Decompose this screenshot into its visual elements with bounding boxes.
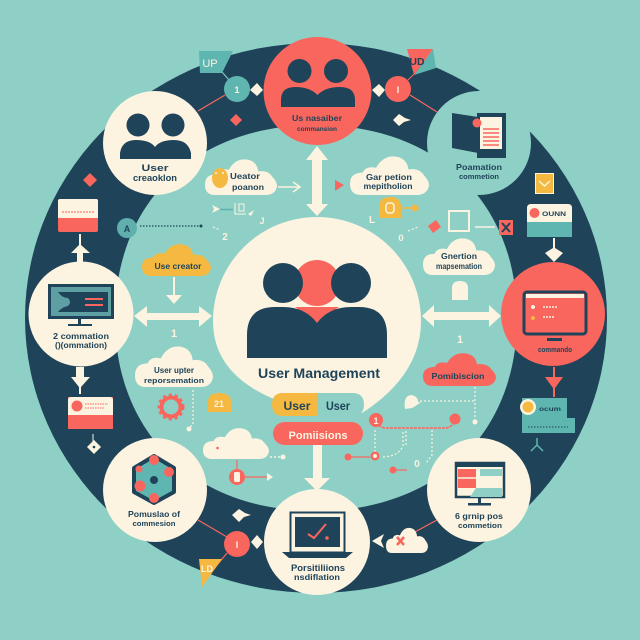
connector: upper-left dotted <box>117 218 202 238</box>
panel: bottom centre laptop: Porsitiliions <box>291 563 345 573</box>
cloud: permission red: Pomibiscion <box>432 372 485 381</box>
icon: red node <box>229 460 273 485</box>
node: top right <box>372 74 437 112</box>
panel: right red monitor <box>501 262 605 366</box>
card: right upper <box>527 204 572 237</box>
node: top left: 1 <box>234 85 240 95</box>
arrow: card to right monitor <box>545 238 563 262</box>
icon: small arrow and bracket: 2 <box>222 232 228 243</box>
tag: top left UP: UP <box>202 58 218 70</box>
pill: user: User <box>284 401 311 413</box>
card: right lower <box>520 398 575 433</box>
panel: bottom right monitor: commetion <box>458 521 502 530</box>
cloud: permission red <box>423 353 496 386</box>
connector: dotted network: 0 <box>414 459 420 470</box>
connector: upper-left dotted: A <box>124 224 131 234</box>
panel: top users circle: Us nasaiber <box>292 114 342 123</box>
panel: central user management <box>213 217 421 413</box>
cloud: gnertion: Gnertion <box>441 252 477 261</box>
card: right upper: OUNN <box>542 211 566 218</box>
panel: bottom left gear: Pomuslao of <box>128 509 180 519</box>
cloud: user person: poanon <box>232 182 264 192</box>
cloud: gnertion: mapsemation <box>436 262 482 271</box>
node: top left <box>198 76 263 111</box>
panel: right red monitor: commando <box>538 345 572 354</box>
arrow: permissions to laptop <box>304 445 330 491</box>
panel: bottom centre laptop: nsdiflation <box>294 573 340 582</box>
arrow: top double arrow <box>306 146 328 216</box>
arrow: left monitor down <box>71 367 90 394</box>
panel: left monitor <box>28 262 134 366</box>
panel: bottom centre laptop <box>264 489 370 595</box>
panel: top users circle: commansion <box>297 127 337 133</box>
cloud: user upter: reporsemation <box>144 376 204 385</box>
cloud: user upter <box>135 346 213 387</box>
outer ring <box>25 43 607 593</box>
pill: permissions <box>273 422 363 445</box>
panel: top users circle <box>264 37 372 145</box>
icon: yellow card <box>536 174 554 194</box>
icon: teal branch <box>531 438 543 451</box>
cloud: gnertion <box>423 238 495 275</box>
heading: user management: User Management <box>258 366 381 381</box>
tag: bottom left LD <box>199 559 222 587</box>
arrow: user creator <box>166 277 182 304</box>
tag: top right UD: UD <box>409 56 425 68</box>
arrow: user person <box>278 182 300 192</box>
arrow: right monitor down <box>545 367 563 397</box>
icon: small arrow and bracket <box>212 203 265 243</box>
tag: top left UP <box>199 51 237 89</box>
connector: dotted network <box>344 387 478 474</box>
connector: dotted network: 1 <box>373 416 379 426</box>
cloud: user person <box>205 159 277 195</box>
icon: cream lock <box>452 281 468 300</box>
panel: bottom right monitor: 6 grnip pos <box>455 512 504 521</box>
panel: left monitor: 2 commation <box>53 332 109 341</box>
arrow: left double arrow <box>134 306 212 327</box>
node: bottom left <box>198 520 263 570</box>
icon: yellow lock <box>379 197 418 218</box>
node: top right: I <box>397 85 399 95</box>
cloud: user person: Ueator <box>230 171 261 181</box>
panel: user creation: User <box>142 163 169 174</box>
badge: yellow number: 21 <box>214 399 224 409</box>
panel: permission document: commetion <box>459 174 499 181</box>
panel: user creation <box>103 91 207 195</box>
card: left upper <box>58 199 98 232</box>
panel: bottom left gear: commesion <box>132 519 176 528</box>
arrow: left monitor to card <box>71 234 90 262</box>
icon: small diamond left <box>87 434 101 454</box>
panel: user creation: creaoklon <box>133 173 177 183</box>
connector: dotted line from cloud <box>186 390 193 432</box>
cloud: bottom right <box>372 520 437 553</box>
card: left lower <box>68 397 113 429</box>
label: left one: 1 <box>171 328 177 340</box>
cloud: cream lower <box>203 428 286 460</box>
tag: bottom left LD: LD <box>201 564 213 574</box>
pill: user <box>272 393 364 416</box>
icon: square connector <box>369 211 513 244</box>
icon: red triangle <box>335 180 344 191</box>
panel: bottom left gear <box>103 438 207 542</box>
icon: square connector: 0 <box>398 233 404 244</box>
cloud: user creator: Use creator <box>154 262 202 271</box>
icon: small arrow and bracket: J <box>259 216 265 226</box>
cloud: user creator <box>142 244 211 276</box>
pill: permissions: Pomiisions <box>288 430 348 442</box>
tag: top right UD <box>407 49 436 75</box>
icon: key bottom left <box>232 509 251 522</box>
panel: permission document: Poamation <box>456 162 502 172</box>
cloud: gar petion: Gar petion <box>366 172 412 182</box>
panel: bottom right monitor <box>427 438 531 542</box>
card: right lower: ocum <box>539 406 561 413</box>
node: bottom left: I <box>236 540 238 550</box>
label: right one: 1 <box>457 334 463 346</box>
cloud: gar petion <box>350 156 429 195</box>
arrow: right double arrow <box>422 305 501 327</box>
icon: gear <box>159 395 183 419</box>
badge: yellow number <box>208 393 231 412</box>
icon: key top right <box>393 114 411 126</box>
icon: red diamond top <box>230 114 242 126</box>
cloud: gar petion: mepitholion <box>364 182 413 191</box>
icon: red diamond left <box>83 173 97 187</box>
pill: user: User <box>326 401 350 413</box>
panel: left monitor: ()(ommation) <box>55 341 107 350</box>
icon: square connector: L <box>369 215 375 226</box>
cloud: user upter: User upter <box>154 366 194 375</box>
panel: permission document <box>427 91 531 195</box>
